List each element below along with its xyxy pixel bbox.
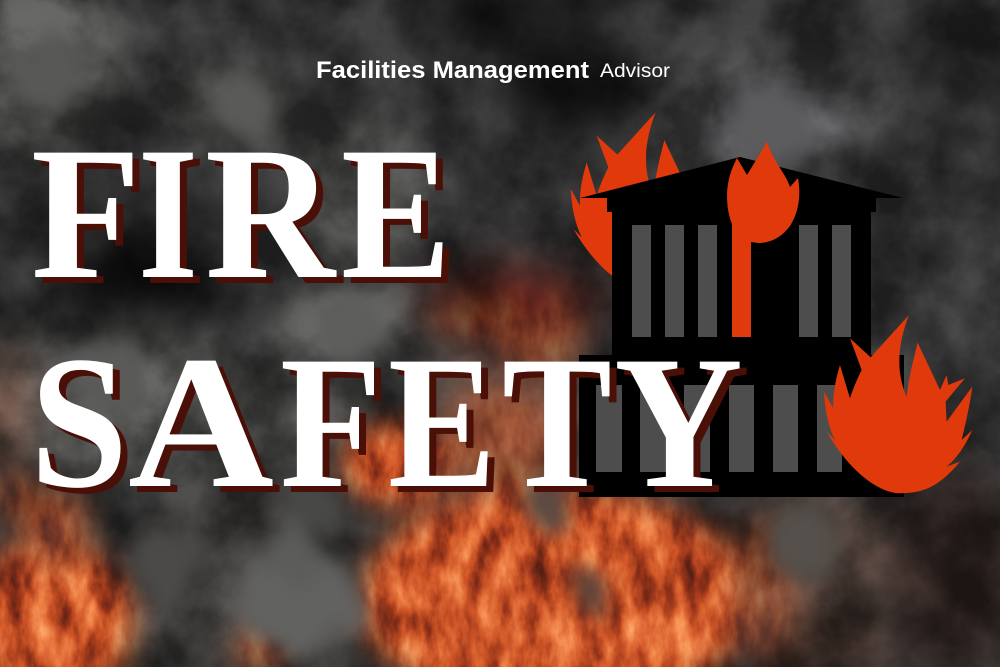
flame in window xyxy=(727,142,799,337)
title letters xyxy=(30,109,743,528)
title letters: A xyxy=(128,318,274,528)
title letters: R xyxy=(205,109,337,319)
building illustration xyxy=(571,112,972,497)
title letters: Y xyxy=(614,318,743,528)
flame, bottom right xyxy=(824,315,972,493)
title letters: E xyxy=(341,109,451,319)
flame behind building, top left xyxy=(571,112,719,291)
title shadow: F xyxy=(287,324,389,534)
building body xyxy=(579,157,904,497)
title shadow: E xyxy=(348,115,458,325)
lower windows xyxy=(596,385,842,472)
title shadow: Y xyxy=(621,324,750,534)
brand line: Advisor xyxy=(600,61,671,82)
title letters: I xyxy=(138,109,198,319)
title letters: F xyxy=(31,109,141,319)
title letters: E xyxy=(388,318,496,528)
title shadow: R xyxy=(212,115,344,325)
title letters: S xyxy=(30,318,128,528)
title shadow: A xyxy=(135,324,281,534)
title shadow: S xyxy=(37,324,135,534)
title shadow: T xyxy=(509,324,619,534)
smoke puffs xyxy=(14,34,836,650)
title shadow: I xyxy=(145,115,205,325)
title shadow: F xyxy=(38,115,148,325)
title letters: F xyxy=(280,318,382,528)
brand line: Facilities Management xyxy=(316,57,589,84)
upper windows xyxy=(632,225,851,337)
fire glow xyxy=(0,283,810,667)
title shadow: E xyxy=(395,324,503,534)
title xyxy=(30,109,750,534)
title letters: T xyxy=(502,318,612,528)
title shadow xyxy=(37,115,750,534)
